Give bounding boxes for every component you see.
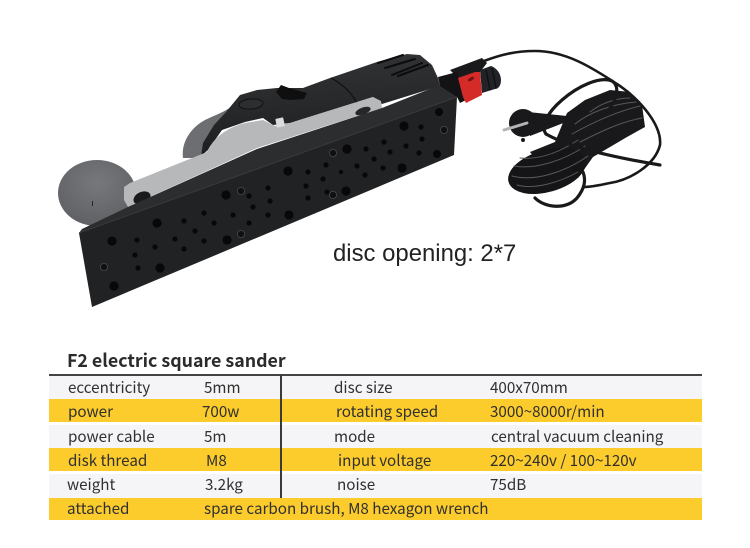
upper coil mass [530,90,645,178]
power plug [504,109,567,142]
small holes [132,124,425,271]
spec row: disk thread / input voltage: 220~240v / 100~120v [490,449,637,471]
spec row: power cable / mode: 5m [204,425,226,447]
spec row: disk thread / input voltage [49,448,702,471]
spec row: weight / noise: 75dB [490,473,526,495]
spec row: weight / noise: weight [67,473,115,495]
spec row: eccentricity / disc size [49,376,702,399]
product photo: electric square sander with cable [58,50,662,307]
spec row: disk thread / input voltage: input voltage [338,449,431,471]
spec row: disk thread / input voltage: disk thread [68,449,147,471]
spec row: weight / noise: 3.2kg [205,473,243,495]
spec row: power / rotating speed: 3000~8000r/min [490,400,605,422]
large holes [107,108,443,291]
cable gland and red ring [438,58,501,103]
screws [100,126,448,271]
motor body [201,54,440,156]
speed switch [276,85,307,100]
spec row: eccentricity / disc size: eccentricity [68,376,150,398]
spec row: weight / noise: noise [337,473,375,495]
silver plate [124,97,382,207]
spec row: power / rotating speed [49,399,702,422]
motor vents [378,55,428,76]
spec row: eccentricity / disc size: disc size [334,376,393,398]
caption: disc opening: disc opening: 2*7 [333,240,516,267]
power cable and coil [484,51,660,206]
spec row: attached accessories [49,498,702,520]
spec row: power cable / mode: central vacuum cleaning [491,425,663,447]
table title: F2 electric square sander [67,347,286,373]
dark top rail [79,85,458,233]
spec row: attached accessories: attached [67,497,129,519]
spec row: power / rotating speed: 700w [202,400,239,422]
grey rear handle [183,106,240,158]
lower coil mass [503,140,591,202]
spec row: power / rotating speed: power [68,400,113,422]
spec row: disk thread / input voltage: M8 [206,449,227,471]
spec row: power cable / mode [49,425,702,448]
perforated sanding plate [79,97,457,307]
spec row: power / rotating speed: rotating speed [336,400,438,422]
spec row: power cable / mode: power cable [68,425,155,447]
spec row: eccentricity / disc size: 400x70mm [490,376,568,398]
spec row: weight / noise [49,474,702,498]
spec row: attached accessories: spare carbon brush, M8 hexagon wrench [204,497,488,519]
spec row: eccentricity / disc size: 5mm [204,376,241,398]
spec row: power cable / mode: mode [334,425,375,447]
grey ball knob [58,160,136,226]
